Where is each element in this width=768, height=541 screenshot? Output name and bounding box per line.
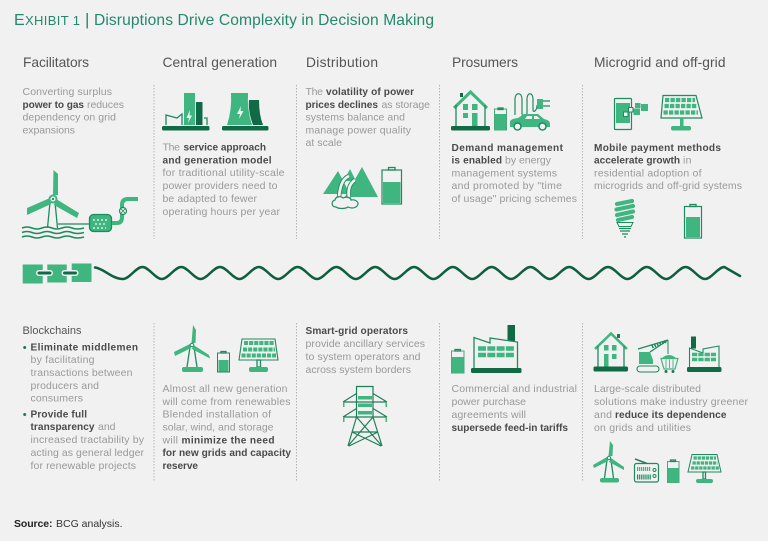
- text: commercial and industrial: supersede feed-in tariffs: [452, 423, 568, 434]
- text: renewables: Blended installation of: [162, 408, 271, 420]
- panel: microgrid and off-grid: [594, 55, 742, 238]
- text: renewables: minimize the need: [182, 436, 274, 446]
- text: microgrid and off-grid: in: [683, 154, 692, 166]
- icon: factory: [471, 325, 522, 373]
- text: large-scale distributed: reduce its dependence: [615, 410, 727, 421]
- icon: transmission pylon: [343, 386, 387, 446]
- text: renewables: reserve: [162, 461, 198, 472]
- icon: house: [451, 92, 490, 130]
- panel: blockchains: [22, 325, 145, 472]
- text: facilitators: power to gas: [22, 100, 84, 111]
- bullet list: blockchains: acting as general ledger: [30, 447, 144, 459]
- text: commercial and industrial: agreements will: [452, 409, 526, 421]
- heading: blockchains: Blockchains: [22, 325, 82, 337]
- text: microgrid and off-grid: Mobile payment methods: [594, 143, 721, 154]
- text: renewables: solar, wind, and storage: [162, 422, 274, 434]
- text: microgrid and off-grid: microgrids and off-grid systems: [594, 180, 742, 192]
- text: microgrid and off-grid: accelerate growth: [594, 156, 680, 166]
- text: prosumers: and promoted by "time: [452, 180, 562, 192]
- text: commercial and industrial: [452, 383, 577, 434]
- text: distribution: at scale: [306, 137, 342, 149]
- text: prosumers: of usage" pricing schemes: [452, 193, 577, 205]
- panel: smart-grid operators: [306, 326, 425, 446]
- wavy transmission line: [95, 267, 740, 279]
- bullet list: blockchains: transparency: [30, 422, 95, 433]
- text: facilitators: expansions: [22, 124, 75, 136]
- heading: facilitators: Facilitators: [23, 55, 89, 70]
- text: facilitators: Converting surplus: [22, 86, 112, 98]
- panel: large-scale distributed: [593, 334, 748, 483]
- text: facilitators: [22, 86, 124, 136]
- text: renewables: Almost all new generation: [162, 383, 288, 395]
- text: microgrid and off-grid: residential adoption of: [594, 168, 702, 180]
- icon: battery: [668, 460, 679, 482]
- text: distribution: volatility of power: [326, 87, 414, 98]
- text: prosumers: by energy: [505, 154, 552, 166]
- text: commercial and industrial: Commercial and industrial: [452, 383, 577, 395]
- text: distribution: prices declines: [306, 100, 378, 111]
- panel: central generation: [162, 55, 285, 218]
- text: renewables: will come from renewables: [162, 396, 290, 408]
- icon: light bulb: [616, 201, 633, 237]
- text: central generation: The: [162, 142, 180, 154]
- text: central generation: operating hours per year: [162, 206, 280, 218]
- text: renewables: [162, 383, 291, 472]
- bullet list: blockchains: Eliminate middlemen: [30, 342, 138, 354]
- text: commercial and industrial: power purchase: [452, 396, 526, 408]
- text: facilitators: dependency on grid: [22, 112, 116, 124]
- bullet list: blockchains: increased tractability by: [30, 434, 145, 446]
- icon: battery: [452, 350, 464, 373]
- icon: radio: [634, 459, 658, 482]
- bullet list: blockchains: [23, 342, 145, 472]
- text: central generation: [162, 142, 285, 218]
- text: large-scale distributed: solutions make industry greener: [594, 396, 748, 408]
- icon: hydro mountains: [323, 167, 378, 208]
- text: central generation: for traditional utility-scale: [162, 167, 285, 179]
- panel: distribution: [306, 55, 430, 208]
- text: large-scale distributed: on grids and utilities: [594, 422, 691, 434]
- source note: [14, 518, 122, 530]
- text: prosumers: Demand management: [452, 143, 564, 154]
- icon: solar panel: [661, 96, 702, 130]
- text: smart-grid operators: provide ancillary services: [306, 338, 425, 350]
- icon: crane and mining cart: [637, 340, 678, 373]
- text: smart-grid operators: across system borders: [306, 364, 411, 376]
- heading: prosumers: Prosumers: [452, 55, 518, 70]
- bullet list: blockchains: transactions between: [30, 367, 133, 379]
- bullet list: blockchains: Provide full: [30, 410, 87, 420]
- icon: solar panel: [688, 454, 721, 483]
- icon: factory: [687, 336, 722, 372]
- bullet list: blockchains: consumers: [30, 392, 83, 404]
- text: prosumers: [452, 143, 577, 205]
- heading: distribution: Distribution: [306, 55, 378, 70]
- panel: facilitators: [22, 55, 138, 238]
- panel: prosumers: [451, 55, 577, 205]
- text: distribution: as storage: [382, 99, 430, 111]
- text: distribution: manage power quality: [306, 124, 412, 136]
- text: prosumers: is enabled: [452, 156, 502, 166]
- source note: Source:: [14, 518, 52, 530]
- heading: central generation: Central generation: [162, 55, 277, 70]
- title: Disruptions Drive Complexity in Decision Making: [94, 12, 434, 29]
- icon: battery: [382, 168, 402, 204]
- bullet list: blockchains: and: [98, 421, 116, 433]
- icon: power plant: [162, 93, 210, 130]
- title: E: [14, 12, 25, 29]
- icon: battery: [218, 352, 230, 372]
- text: distribution: systems balance and: [306, 112, 405, 124]
- text: central generation: be adapted to fewer: [162, 193, 258, 205]
- text: large-scale distributed: and: [594, 409, 612, 421]
- text: microgrid and off-grid: [594, 143, 742, 192]
- source note: BCG analysis.: [56, 518, 122, 530]
- text: central generation: service approach: [184, 142, 266, 154]
- text: central generation: power providers need to: [162, 180, 278, 192]
- heading: microgrid and off-grid: Microgrid and off-grid: [594, 55, 726, 70]
- bullet list: blockchains: by facilitating: [30, 354, 95, 366]
- icon: blockchain links: [23, 264, 92, 284]
- text: distribution: [306, 86, 430, 149]
- icon: house: [594, 334, 628, 372]
- text: central generation: and generation model: [162, 156, 272, 166]
- text: smart-grid operators: [306, 326, 425, 376]
- icon: wind turbine: [174, 325, 210, 372]
- icon: cooling tower: [222, 93, 268, 130]
- text: smart-grid operators: Smart-grid operators: [306, 326, 408, 337]
- text: large-scale distributed: Large-scale distributed: [594, 383, 701, 395]
- text: distribution: The: [306, 86, 323, 98]
- text: facilitators: reduces: [87, 99, 124, 111]
- panel: commercial and industrial: [452, 325, 577, 434]
- text: renewables: will: [162, 434, 178, 446]
- text: renewables: for new grids and capacity: [162, 448, 291, 459]
- icon: mobile phone payment: [614, 98, 648, 130]
- icon: electric car with plug: [510, 94, 550, 130]
- title: XHIBIT 1: [25, 13, 80, 28]
- panel: renewables: [162, 325, 291, 472]
- text: large-scale distributed: [594, 383, 748, 434]
- icon: battery: [494, 108, 506, 130]
- bullet list: blockchains: for renewable projects: [30, 460, 136, 472]
- text: prosumers: management systems: [452, 168, 557, 180]
- icon: solar panel: [239, 339, 278, 372]
- icon: wind turbine with power-to-gas converter: [22, 170, 138, 238]
- text: smart-grid operators: to system operators and: [306, 351, 421, 363]
- bullet list: blockchains: producers and: [30, 380, 99, 392]
- icon: wind turbine: [593, 441, 624, 482]
- icon: battery: [684, 204, 702, 238]
- title: |: [85, 10, 89, 29]
